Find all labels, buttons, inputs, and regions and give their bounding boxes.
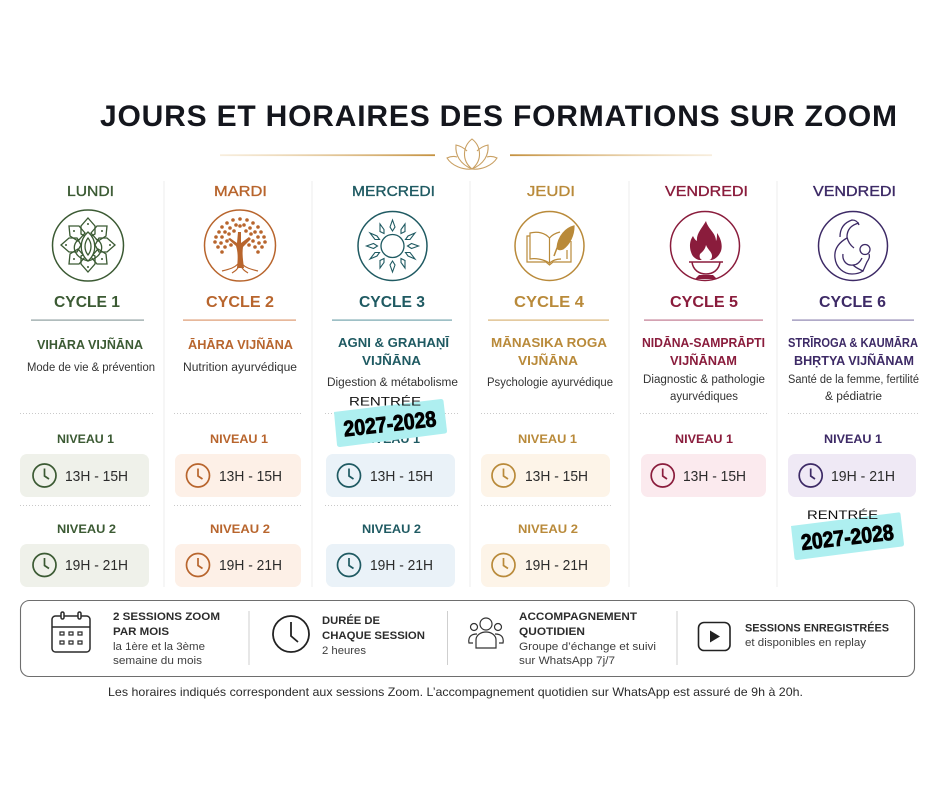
icon: calendar [52, 612, 90, 652]
description: Santé de la femme, fertilité [788, 374, 919, 386]
level 1 [174, 414, 301, 497]
description: Nutrition ayurvédique [183, 362, 297, 374]
cycle label: CYCLE 5 [670, 294, 738, 311]
level 1: NIVEAU 1 [210, 432, 268, 446]
level 1 [325, 414, 458, 497]
day label: LUNDI [67, 183, 114, 200]
level 2: 19H - 21H [65, 557, 128, 574]
info panel [20, 600, 914, 676]
description [643, 374, 765, 403]
subject [642, 336, 765, 368]
icon: clock [273, 616, 309, 652]
info: sessions per month: PAR MOIS [113, 626, 169, 638]
rule [31, 320, 144, 321]
level 2 [481, 506, 613, 587]
rule [332, 320, 452, 321]
level 1 [20, 414, 153, 497]
badge: rentrée 2027-2028 on cycle 3 [334, 396, 447, 447]
info: daily support: ACCOMPAGNEMENT [519, 611, 637, 623]
badge: rentrée 2027-2028 on cycle 6: 2027-2028 [800, 520, 895, 555]
subject: VIHĀRA VIJÑĀNA [37, 337, 143, 352]
day label: MARDI [214, 183, 267, 200]
info: sessions per month [52, 611, 220, 667]
footnote: Les horaires indiqués correspondent aux sessions Zoom. L’accompagnement quotidien sur WhatsApp est assuré de 9h à 20h. [108, 685, 803, 699]
description: Digestion & métabolisme [327, 377, 458, 389]
level 1: NIVEAU 1 [518, 432, 577, 446]
rule [183, 320, 296, 321]
level 2 [20, 506, 152, 587]
badge: rentrée 2027-2028 on cycle 6 [791, 509, 904, 560]
subject [338, 336, 450, 368]
level 2 [174, 506, 301, 587]
description: ayurvédiques [670, 391, 738, 403]
icon: play button [698, 622, 730, 650]
title: JOURS ET HORAIRES DES FORMATIONS SUR ZOOM [100, 100, 897, 133]
rule [644, 320, 763, 321]
icon: group of people [469, 618, 503, 648]
subject: MĀNASIKA ROGA [491, 336, 607, 350]
icon: sacred flame [670, 212, 740, 280]
title ornament: lotus and gold rules [220, 139, 712, 169]
info: daily support: sur WhatsApp 7j/7 [519, 655, 615, 667]
info: recorded sessions [698, 622, 889, 650]
cycle label: CYCLE 4 [514, 294, 584, 311]
level 2: NIVEAU 2 [210, 522, 270, 536]
level 1 [640, 414, 767, 497]
subject: NIDĀNA-SAMPRĀPTI [642, 336, 765, 350]
info: session length: 2 heures [322, 645, 367, 657]
info: recorded sessions: et disponibles en replay [745, 637, 867, 649]
info: daily support [469, 611, 656, 667]
day label: VENDREDI [665, 183, 748, 200]
level 2: NIVEAU 2 [362, 522, 421, 536]
day label: MERCREDI [352, 183, 435, 200]
subject: VIJÑĀNA [362, 353, 421, 368]
level 1: NIVEAU 1 [362, 432, 420, 446]
description: Mode de vie & prévention [27, 362, 155, 374]
icon: sun [358, 212, 427, 280]
subject [788, 336, 918, 368]
badge: rentrée 2027-2028 on cycle 3: 2027-2028 [342, 406, 437, 441]
column: Jeudi, cycle 4 [481, 183, 616, 587]
level 2: NIVEAU 2 [518, 522, 578, 536]
info: sessions per month: 2 SESSIONS ZOOM [113, 611, 220, 623]
rule [488, 320, 609, 321]
subject: BHṚTYA VIJÑĀNAM [794, 353, 914, 368]
level 1: 13H - 15H [219, 468, 282, 485]
day label: JEUDI [527, 183, 575, 200]
info: session length [273, 614, 425, 657]
info: daily support: Groupe d’échange et suivi [519, 641, 656, 653]
level 2 [325, 506, 458, 587]
description: Diagnostic & pathologie [643, 374, 765, 386]
subject: STRĪROGA & KAUMĀRA [788, 336, 918, 350]
level 2: 19H - 21H [370, 557, 433, 574]
cycle label: CYCLE 6 [819, 294, 886, 311]
level 1: 13H - 15H [370, 468, 433, 485]
description [788, 374, 919, 403]
column: Mercredi, cycle 3 [325, 183, 458, 587]
level 2: 19H - 21H [219, 557, 282, 574]
column: Lundi, cycle 1 [20, 183, 155, 587]
description: & pédiatrie [825, 391, 882, 403]
info: daily support: QUOTIDIEN [519, 626, 585, 638]
cycle label: CYCLE 1 [54, 294, 120, 311]
level 1: 13H - 15H [683, 468, 746, 485]
badge: rentrée 2027-2028 on cycle 6: RENTRÉE [807, 509, 878, 522]
cycle label: CYCLE 2 [206, 294, 274, 311]
level 1: NIVEAU 1 [57, 432, 114, 446]
icon: tree of life [204, 210, 276, 281]
cycle label: CYCLE 3 [359, 294, 425, 311]
level 1: NIVEAU 1 [675, 432, 733, 446]
subject: VIJÑĀNAM [670, 353, 737, 368]
badge: rentrée 2027-2028 on cycle 3: RENTRÉE [349, 396, 421, 408]
subject: ĀHĀRA VIJÑĀNA [188, 337, 293, 352]
rule [792, 320, 914, 321]
column: Vendredi, cycle 6 [788, 183, 919, 497]
info: recorded sessions: SESSIONS ENREGISTRÉES [745, 622, 889, 634]
day label: VENDREDI [813, 183, 896, 200]
level 1: 13H - 15H [525, 468, 588, 485]
level 1: 19H - 21H [831, 468, 895, 485]
level 1: 13H - 15H [65, 468, 128, 485]
icon: mother and child [818, 212, 888, 280]
level 1: NIVEAU 1 [824, 432, 882, 446]
icon: lotus mandala [52, 210, 124, 281]
level 2: 19H - 21H [525, 557, 588, 574]
level 1 [481, 414, 616, 497]
description: Psychologie ayurvédique [487, 377, 613, 389]
icon: book and feather [515, 212, 584, 280]
column: Mardi, cycle 2 [174, 183, 301, 587]
column dividers [164, 181, 777, 587]
level 2: NIVEAU 2 [57, 522, 116, 536]
column: Vendredi, cycle 5 [640, 183, 767, 497]
subject: AGNI & GRAHAṆĪ [338, 336, 450, 350]
subject [491, 336, 607, 368]
info: sessions per month: la 1ère et la 3ème [113, 641, 205, 653]
info: session length: CHAQUE SESSION [322, 630, 425, 642]
info: sessions per month: semaine du mois [113, 655, 203, 667]
level 1 [788, 414, 918, 497]
subject: VIJÑĀNA [518, 353, 578, 368]
info: session length: DURÉE DE [322, 614, 380, 627]
